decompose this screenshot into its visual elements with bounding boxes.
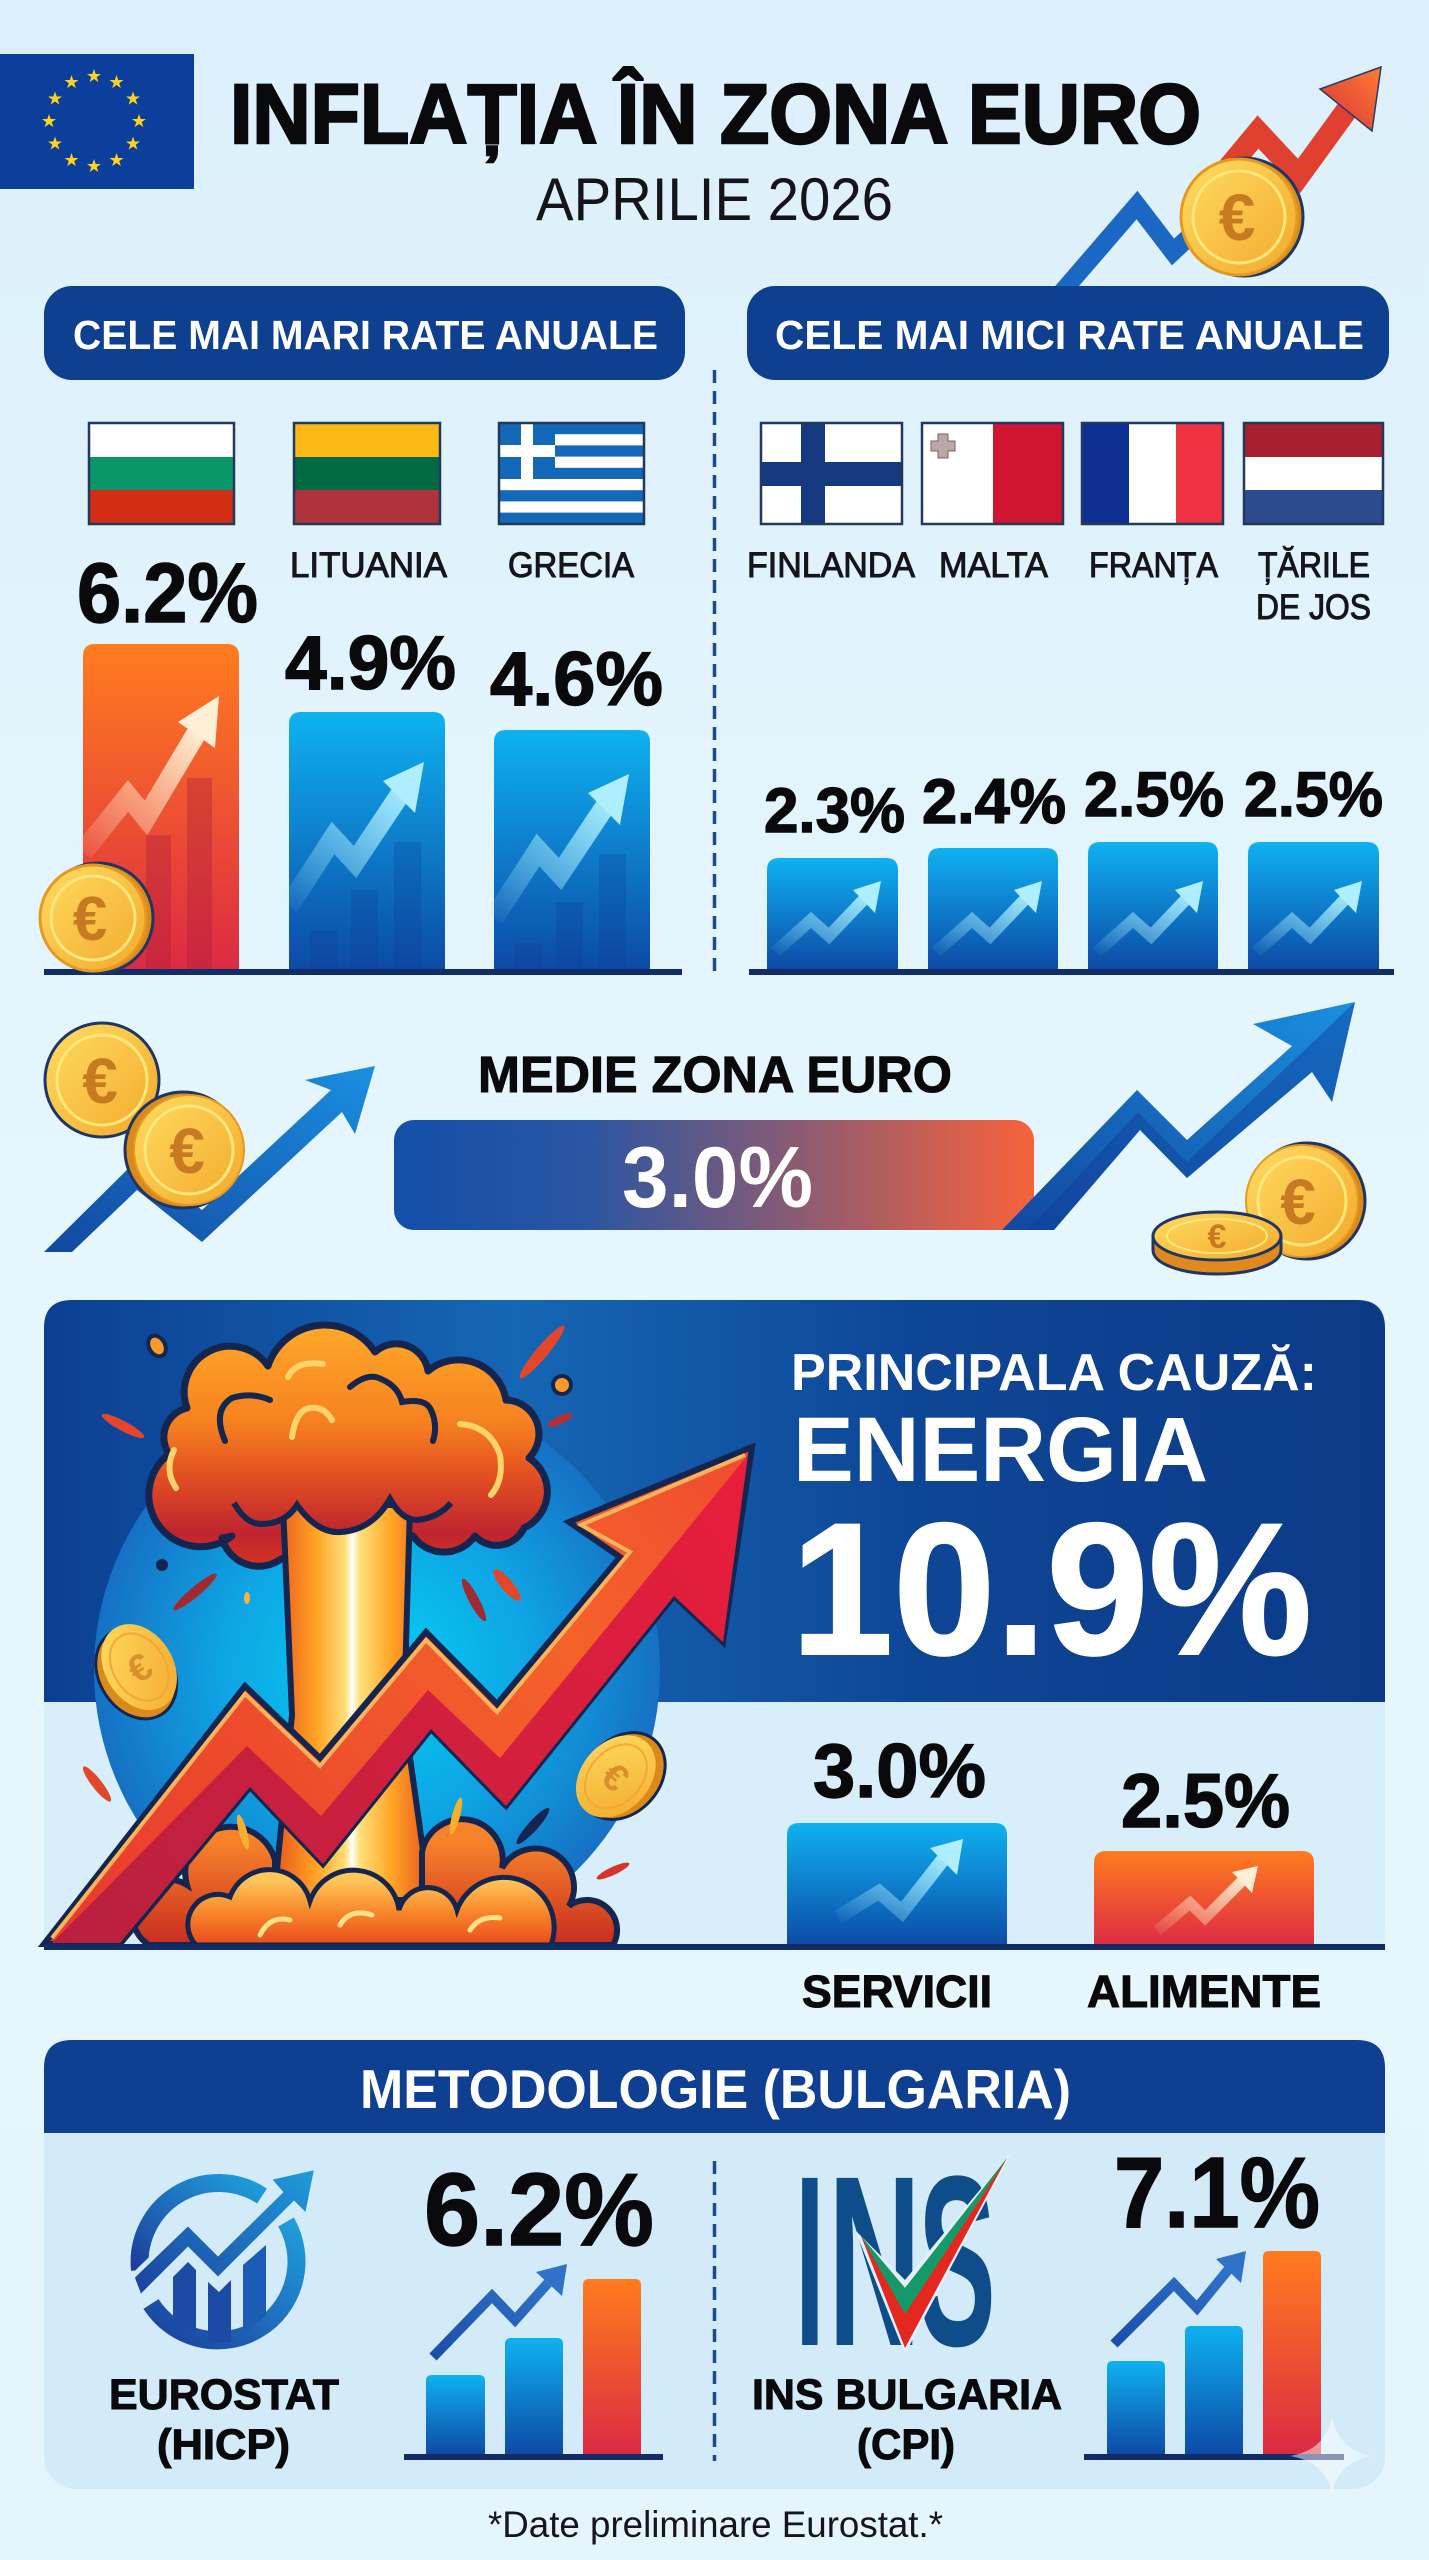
bar: Finland 2.3% [764, 776, 905, 969]
subtitle: APRILIE 2026 [536, 166, 893, 233]
flag: Malta [922, 423, 1063, 524]
icon: tilted coin left: € [120, 1645, 160, 1692]
bar: Greece 4.6% [490, 637, 663, 969]
icon: left arrow with coins: € [82, 1045, 118, 1117]
Eurostat label: EUROSTAT [109, 2371, 339, 2419]
average label: MEDIE ZONA EURO [478, 1046, 952, 1103]
country labels: lowest: FRANȚA [1089, 546, 1219, 585]
bar: food 2.5%: ALIMENTE [1087, 1966, 1321, 2017]
arrow: big red rising arrow [44, 1447, 752, 1944]
bar: food 2.5% [1087, 1759, 1321, 2017]
icon: INS logo: N [828, 2126, 921, 2397]
cloud cap [149, 1325, 547, 1566]
bar: services 3.0%: 3.0% [813, 1729, 986, 1814]
panel background [44, 1300, 1385, 1953]
panel: methodology [44, 2040, 1385, 2489]
bar: Malta 2.4% [922, 767, 1066, 969]
bar: France 2.5% [1084, 760, 1224, 969]
Eurostat value: 6.2% [424, 2152, 654, 2267]
cause value: 10.9% [791, 1484, 1312, 1694]
flag: Finland [761, 423, 902, 524]
base cloud front [188, 1870, 554, 1945]
INS label [752, 2371, 1062, 2469]
icon: right arrow with coins: € [1208, 1218, 1227, 1256]
bar: services 3.0%: SERVICII [802, 1966, 992, 2017]
icon: euro coin [40, 863, 153, 973]
header: lowest annual rates: CELE MAI MICI RATE ANUALE [775, 312, 1364, 358]
title: INFLAȚIA ÎN ZONA EURO [230, 67, 1201, 162]
bar: Netherlands 2.5%: 2.5% [1244, 760, 1383, 830]
icon: rising arrow with euro coin: € [1219, 180, 1255, 254]
bar chart: highest rates [40, 546, 682, 975]
cause heading: PRINCIPALA CAUZĂ: [791, 1344, 1317, 1402]
watermark sparkle [1290, 2416, 1372, 2494]
INS value: 7.1% [1114, 2137, 1320, 2249]
bar: France 2.5%: 2.5% [1084, 760, 1224, 830]
cause name: ENERGIA [793, 1399, 1208, 1501]
country labels: lowest: MALTA [939, 546, 1049, 585]
methodology heading: METODOLOGIE (BULGARIA) [360, 2058, 1071, 2120]
bar: Netherlands 2.5% [1244, 760, 1383, 969]
header: lowest annual rates [747, 286, 1389, 380]
country labels: lowest [747, 546, 1371, 627]
debris and sparks [80, 1322, 631, 1882]
bar chart: lowest rates [749, 760, 1394, 975]
icon: INS logo: I [795, 2125, 825, 2397]
header: highest annual rates: CELE MAI MARI RATE ANUALE [73, 312, 658, 358]
cap underside [234, 1470, 451, 1532]
bar: food 2.5%: 2.5% [1121, 1759, 1290, 1844]
bar: Greece 4.6%: 4.6% [490, 637, 663, 722]
icon: tilted coin right [560, 1714, 683, 1839]
icon: INS logo [795, 2125, 1013, 2397]
flag: France [1082, 423, 1223, 524]
illustration: mushroom cloud [133, 1325, 617, 1945]
Eurostat label: (HICP) [157, 2421, 290, 2469]
bar: Bulgaria 6.2% [77, 546, 258, 969]
country labels: highest [290, 546, 635, 585]
panel: main cause energy [44, 1300, 1385, 2017]
country labels: highest: GRECIA [508, 546, 635, 585]
icon: tilted coin right: € [593, 1755, 636, 1801]
flag: Netherlands [1244, 423, 1383, 524]
country labels: lowest: ȚĂRILE [1258, 546, 1370, 585]
icon: euro coin: € [73, 885, 107, 954]
Eurostat label [109, 2371, 339, 2469]
bar: Lithuania 4.9% [285, 621, 456, 969]
icon: INS logo: S [918, 2126, 996, 2397]
icon: rising arrow with euro coin [1062, 67, 1381, 292]
bar chart: Eurostat [404, 2264, 663, 2460]
header: highest annual rates [44, 286, 685, 380]
icon: Eurostat logo [132, 2167, 317, 2342]
icon: left arrow with coins: € [169, 1115, 205, 1187]
bar: Malta 2.4%: 2.4% [922, 767, 1066, 837]
bar: Finland 2.3%: 2.3% [764, 776, 905, 846]
icon: EU flag [0, 54, 194, 189]
flag: Bulgaria [89, 423, 234, 524]
bar: services 3.0% [787, 1729, 1007, 2017]
country labels: lowest: FINLANDA [747, 546, 916, 585]
stem [274, 1505, 430, 1900]
flag: Lithuania [294, 423, 440, 524]
INS label: (CPI) [857, 2421, 955, 2469]
icon: tilted coin left [78, 1610, 196, 1734]
bar: Bulgaria 6.2%: 6.2% [77, 546, 258, 640]
base cloud back [133, 1827, 275, 1945]
INS label: INS BULGARIA [752, 2371, 1062, 2419]
bar chart: INS [1084, 2251, 1344, 2460]
country labels: lowest: DE JOS [1256, 588, 1371, 627]
footnote: *Date preliminare Eurostat.* [488, 2504, 943, 2545]
average bar 3.0%: 3.0% [622, 1130, 813, 1226]
average bar 3.0% [394, 1120, 1034, 1230]
icon: left arrow with coins [44, 1023, 375, 1252]
bar: Lithuania 4.9%: 4.9% [285, 621, 456, 706]
country labels: highest: LITUANIA [290, 546, 448, 585]
icon: right arrow with coins [1002, 1002, 1365, 1274]
flag: Greece [499, 423, 644, 524]
icon: right arrow with coins: € [1280, 1166, 1316, 1238]
